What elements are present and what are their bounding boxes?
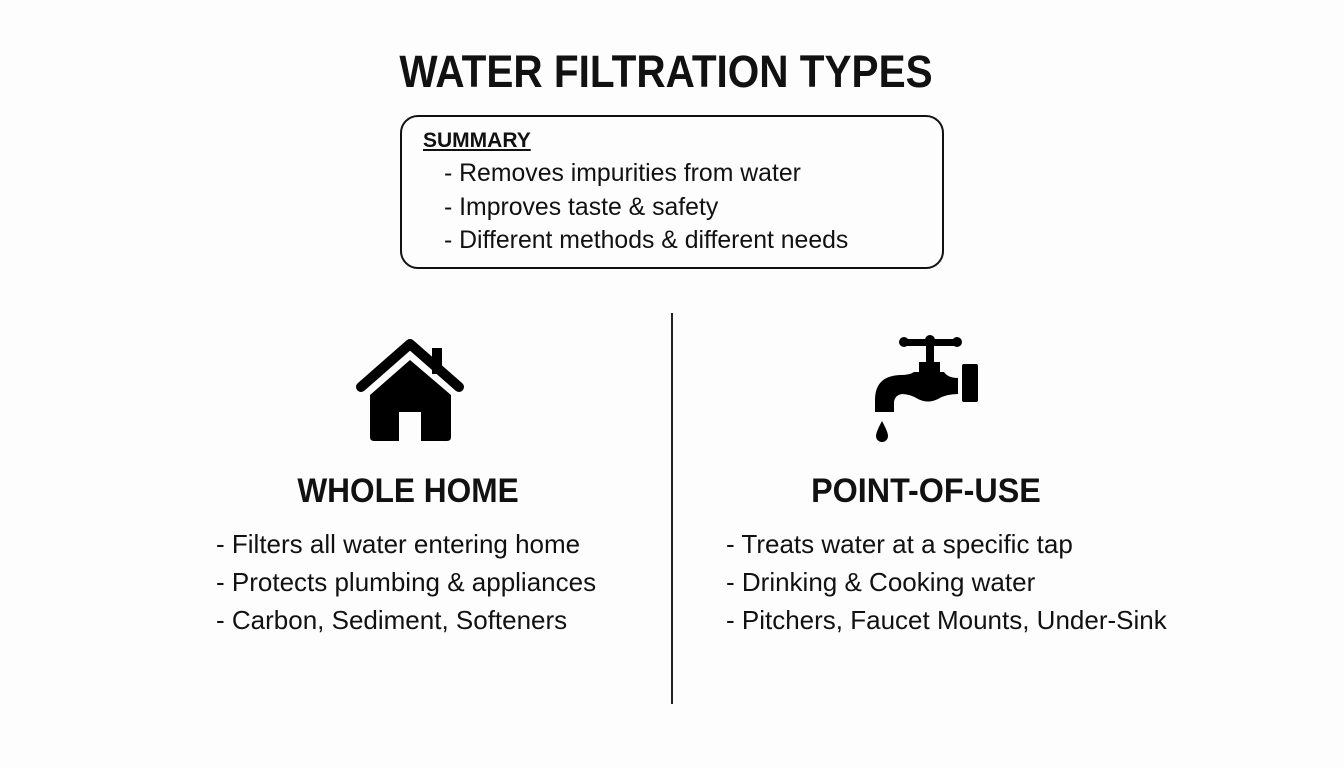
list: point-of-use: - Pitchers, Faucet Mounts, Under-Sink bbox=[726, 605, 1167, 635]
list: whole home: - Protects plumbing & appliances bbox=[216, 567, 596, 597]
summary list: - Improves taste & safety bbox=[444, 194, 718, 220]
summary list: - Different methods & different needs bbox=[444, 227, 848, 254]
summary list: - Removes impurities from water bbox=[444, 160, 801, 187]
list: point-of-use bbox=[726, 529, 1167, 635]
list: point-of-use: - Treats water at a specific tap bbox=[726, 529, 1073, 559]
list: whole home: - Carbon, Sediment, Softeners bbox=[216, 605, 567, 635]
summary list bbox=[444, 160, 848, 254]
summary heading: SUMMARY bbox=[423, 129, 531, 152]
list: whole home: - Filters all water entering home bbox=[216, 529, 580, 559]
heading: point-of-use: POINT-OF-USE bbox=[811, 472, 1041, 510]
list: whole home bbox=[216, 529, 596, 635]
list: point-of-use: - Drinking & Cooking water bbox=[726, 567, 1035, 597]
title: WATER FILTRATION TYPES bbox=[399, 46, 933, 97]
summary box bbox=[400, 115, 944, 269]
divider bbox=[671, 313, 673, 704]
heading: whole home: WHOLE HOME bbox=[297, 472, 519, 510]
